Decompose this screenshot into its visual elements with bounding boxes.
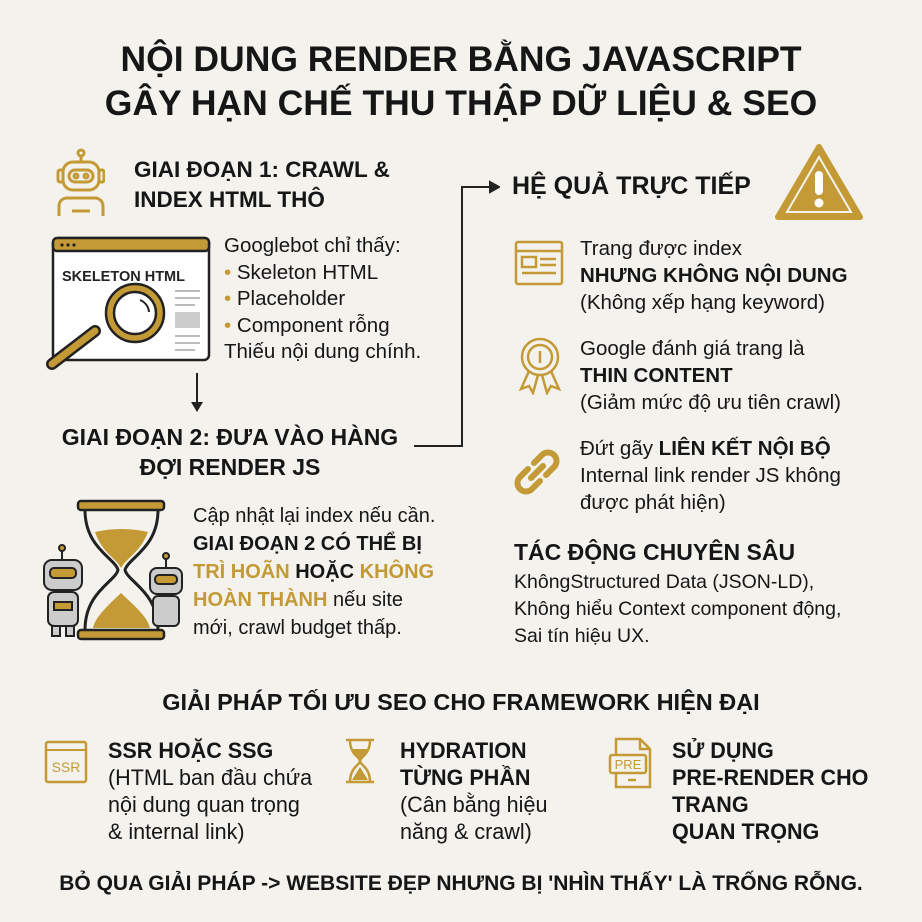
text: SỬ DỤNG [672,738,774,763]
text: (Cân bằng hiệu [400,792,547,817]
heading: stage 2: GIAI ĐOẠN 2: ĐƯA VÀO HÀNG [62,424,398,450]
icon: PRE file [608,738,652,788]
icon: hourglass [346,738,374,784]
heading: stage 2 [62,424,398,480]
text: googlebot sees [224,234,421,363]
text: stage 2 details: TRÌ HOÃN HOẶC KHÔNG [193,561,434,583]
footer note: BỎ QUA GIẢI PHÁP -> WEBSITE ĐẸP NHƯNG BỊ 'NHÌN THẤY' LÀ TRỐNG RỖNG. [59,872,863,895]
icon: page [514,240,564,286]
text: HYDRATION [400,738,527,763]
text: stage 2 details: GIAI ĐOẠN 2 CÓ THỂ BỊ [193,533,422,555]
text: nội dung quan trọng [108,792,300,817]
text: Trang được index [580,237,742,260]
heading: stage 1: INDEX HTML THÔ [134,187,325,212]
text: stage 2 details [193,505,435,639]
heading: stage 1 [134,157,390,212]
heading: stage 2: ĐỢI RENDER JS [140,454,320,480]
text [400,738,547,844]
text: in-depth impact: Không hiểu Context component động, [514,598,841,620]
text: TỪNG PHẦN [400,765,530,790]
solution: pre-render [608,738,868,844]
text [108,738,312,844]
title [105,39,817,123]
text: (Giảm mức độ ưu tiên crawl) [580,391,841,414]
text: SSR HOẶC SSG [108,738,273,763]
heading: direct consequences: HỆ QUẢ TRỰC TIẾP [512,172,751,200]
text: stage 2 details: Cập nhật lại index nếu cần. [193,505,435,527]
text: in-depth impact: KhôngStructured Data (JSON-LD), [514,571,814,593]
text: googlebot sees: Thiếu nội dung chính. [224,340,421,363]
heading: stage 1: GIAI ĐOẠN 1: CRAWL & [134,157,390,182]
icon: SSR: SSR [52,759,80,775]
icon: chain link [514,450,560,494]
item: broken internal links [514,436,841,514]
text [672,738,868,844]
text: googlebot sees: • Component rỗng [224,314,390,336]
text: được phát hiện) [580,491,726,514]
icon: hourglass with robots [43,500,183,640]
icon: browser skeleton with magnifier: SKELETON HTML [62,269,185,285]
text: THIN CONTENT [580,364,733,387]
item: indexed but no content [514,237,848,314]
heading: in-depth impact: TÁC ĐỘNG CHUYÊN SÂU [514,539,795,565]
text: stage 2 details: mới, crawl budget thấp. [193,617,402,639]
text [580,237,848,314]
text: googlebot sees: • Skeleton HTML [224,260,378,284]
arrow: down [191,373,203,412]
text: PRE-RENDER CHO [672,765,868,790]
text: (Không xếp hạng keyword) [580,291,825,314]
text: in-depth impact: Sai tín hiệu UX. [514,625,650,647]
heading: solutions: GIẢI PHÁP TỐI ƯU SEO CHO FRAMEWORK HIỆN ĐẠI [162,689,760,715]
icon: robot [56,148,105,216]
text: Google đánh giá trang là [580,337,805,360]
text: in-depth impact [514,571,841,647]
text: (HTML ban đầu chứa [108,765,312,790]
text: stage 2 details: HOÀN THÀNH nếu site [193,589,403,611]
text: googlebot sees: Googlebot chỉ thấy: [224,234,401,257]
icon: SSR [44,740,88,784]
text: NHƯNG KHÔNG NỘI DUNG [580,264,848,287]
text: QUAN TRỌNG [672,819,819,844]
title: GÂY HẠN CHẾ THU THẬP DỮ LIỆU & SEO [105,83,817,123]
icon: award [518,338,562,395]
solution: hydration [346,738,547,844]
text: Đứt gãy LIÊN KẾT NỘI BỘ [580,437,831,460]
solution: SSR/SSG [44,738,312,844]
icon: PRE file: PRE [615,757,642,772]
arrow: connector to consequences [414,180,500,447]
text: TRANG [672,792,749,817]
item: thin content [518,337,841,414]
icon: browser skeleton with magnifier [46,236,210,370]
icon: warning [775,144,863,220]
text [580,337,841,414]
text [580,436,841,514]
text: Internal link render JS không [580,464,841,487]
text: googlebot sees: • Placeholder [224,287,345,310]
title: NỘI DUNG RENDER BẰNG JAVASCRIPT [120,39,802,79]
text: năng & crawl) [400,819,532,844]
text: & internal link) [108,819,245,844]
